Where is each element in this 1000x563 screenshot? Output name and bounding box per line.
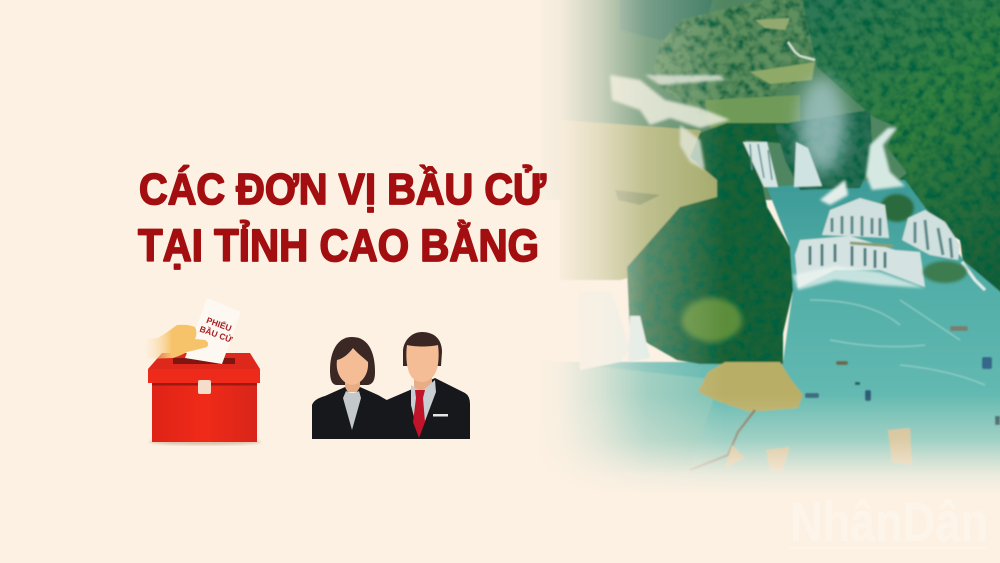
pocket square — [433, 414, 448, 416]
box lid top — [148, 353, 260, 369]
ballot slot — [173, 358, 235, 364]
light tree patch — [682, 298, 742, 342]
upper valley fields — [650, 0, 815, 115]
man tie — [413, 390, 425, 438]
box body — [152, 383, 257, 442]
hand — [146, 325, 208, 359]
upper middle waterfall — [794, 142, 822, 187]
man face — [406, 345, 439, 382]
upper left waterfall — [743, 142, 778, 187]
right rapids — [962, 262, 985, 290]
photo fade to the left — [520, 0, 725, 563]
man hair — [403, 332, 442, 366]
central dark forest — [627, 123, 800, 364]
forest behind the upper falls — [775, 110, 873, 190]
right waterfall — [902, 210, 960, 260]
small field and stream — [750, 18, 815, 84]
foreground sand bars — [725, 428, 912, 472]
main lower waterfall tier — [795, 236, 925, 288]
valley floor — [540, 0, 1000, 200]
aerial photo: Ban Gioc waterfall — [540, 0, 1000, 500]
woman — [312, 337, 392, 439]
woman suit — [312, 387, 392, 439]
ballot label: BẦU CỬ — [198, 323, 235, 345]
right forested mountain — [800, 0, 1000, 300]
icon: two candidates — [312, 332, 470, 439]
middle waterfall tier — [822, 198, 889, 238]
upper left slope — [620, 0, 715, 40]
title — [138, 163, 546, 271]
man — [382, 332, 470, 439]
spray at foot of falls — [793, 266, 925, 290]
water highlights — [810, 300, 985, 385]
left lower waterfall — [578, 292, 650, 370]
man shirt — [411, 380, 436, 437]
upper rapids — [610, 75, 730, 170]
band of fields above the falls — [705, 95, 800, 128]
watermark underline — [790, 547, 986, 549]
mist plume — [798, 77, 846, 173]
box lid front — [148, 369, 260, 383]
box shadow — [149, 439, 261, 445]
icon: ballot box with hand — [146, 298, 261, 445]
woman neck — [345, 376, 360, 392]
woman blouse — [343, 391, 361, 430]
title line 2: TẠI TỈNH CAO BẰNG — [138, 220, 539, 271]
man suit — [382, 378, 470, 439]
beach peninsula — [698, 362, 803, 412]
lid shadow — [152, 383, 257, 386]
ballot paper — [185, 298, 241, 364]
island forest between falls — [880, 194, 914, 222]
right bank forest — [923, 261, 967, 283]
boats — [805, 326, 1000, 425]
photo fade to the bottom — [520, 395, 1000, 563]
man neck — [414, 372, 432, 392]
river and pool — [540, 180, 1000, 500]
ballot label — [198, 315, 235, 345]
title line 1: CÁC ĐƠN VỊ BẦU CỬ — [139, 163, 546, 214]
terrace shadows — [615, 190, 660, 205]
woman face — [337, 348, 368, 385]
left lower pool — [540, 360, 720, 480]
box clasp — [198, 380, 211, 394]
footbridge — [690, 410, 755, 470]
woman hair — [330, 337, 375, 385]
right side cascades — [820, 128, 905, 205]
terraced fields — [560, 120, 725, 280]
ballot label: PHIẾU — [205, 315, 233, 333]
